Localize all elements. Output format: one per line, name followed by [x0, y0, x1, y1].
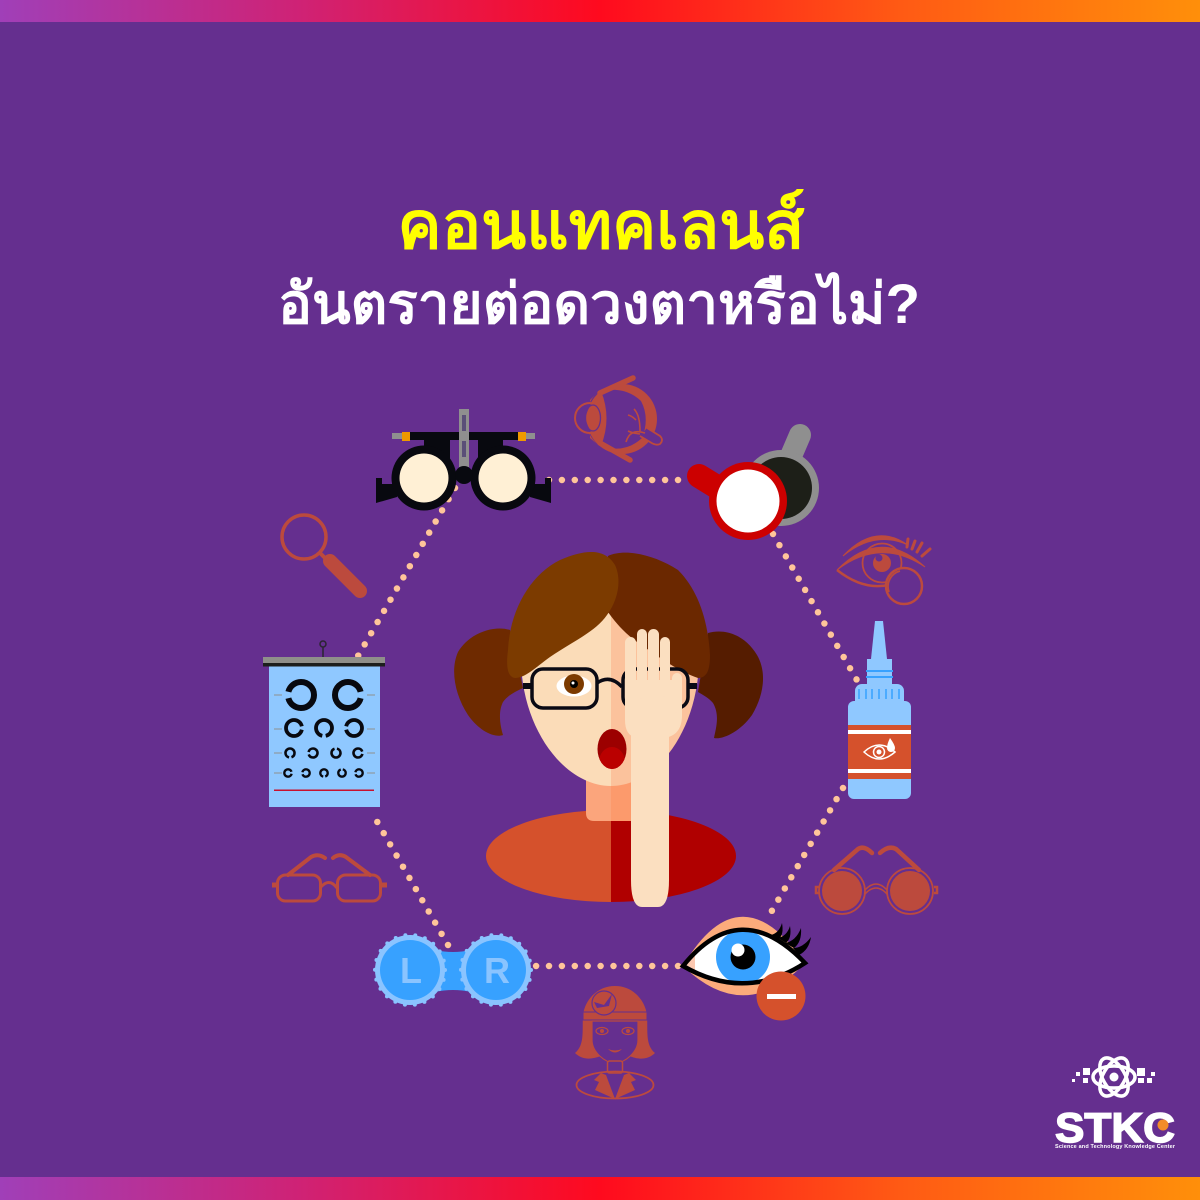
STKC logo: [1055, 1053, 1176, 1151]
glasses: [523, 669, 697, 708]
logo tagline: Science and Technology Knowledge Center: [1055, 1144, 1176, 1150]
icon: lashed eye with lens: [837, 536, 930, 604]
left eye: [556, 674, 592, 696]
bottom gradient bar: [0, 1177, 1200, 1200]
icon: eye chart: [263, 641, 385, 807]
title: คอนแทคเลนส์: [398, 188, 805, 262]
icon: slit lens with red handle: [699, 435, 819, 540]
icon: contact lens case: [375, 935, 531, 1005]
icon: eye doctor: [575, 986, 655, 1099]
icon: blue eye with minus badge: [683, 917, 811, 1020]
icon: eye drop bottle: [848, 621, 911, 799]
pigtail left: [454, 628, 523, 736]
icon: magnifier: [282, 515, 360, 591]
pigtail right: [698, 631, 763, 738]
icon: contact lens case: L: [400, 950, 422, 991]
logo atom: [1093, 1053, 1135, 1101]
shirt: [486, 810, 736, 902]
subtitle: อันตรายต่อดวงตาหรือไม่?: [278, 271, 920, 335]
hand and arm: [625, 629, 682, 907]
face: [521, 600, 699, 786]
icon: square glasses: [272, 855, 387, 901]
logo orange dot: [1158, 1120, 1168, 1130]
top gradient bar: [0, 0, 1200, 22]
logo wordmark: STKC: [1055, 1104, 1175, 1151]
icon: contact lens case: R: [484, 950, 510, 991]
mouth: [598, 729, 626, 769]
hair right: [608, 553, 710, 678]
icon: round glasses: [816, 848, 937, 914]
logo side dots: [1072, 1068, 1155, 1083]
hair left: [507, 552, 618, 678]
icon: trial frame glasses: [376, 409, 551, 510]
illustration: girl covering one eye: [454, 552, 763, 907]
dotted hexagon connectors: [358, 480, 858, 966]
icon: eyeball anatomy: [575, 378, 662, 460]
neck: [586, 770, 640, 821]
